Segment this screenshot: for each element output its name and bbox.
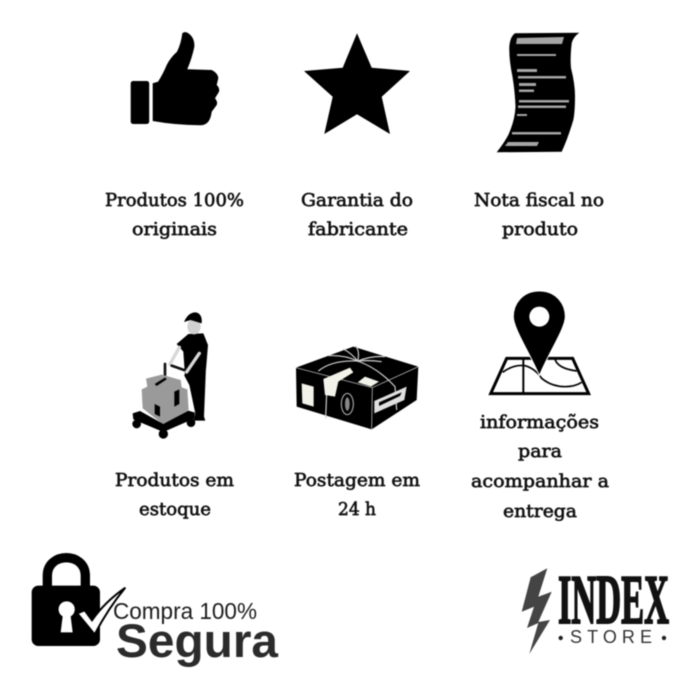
text: Produtos em estoque (115, 470, 234, 520)
logo: Index Store (522, 562, 669, 654)
icon: star (304, 33, 410, 134)
arms (170, 347, 199, 372)
handle plate (374, 387, 407, 413)
badge: secure purchase (32, 558, 279, 667)
ribbon (318, 346, 397, 418)
box edges (296, 367, 418, 429)
dots (558, 636, 666, 640)
text: informações para acompanhar a entrega: entrega (503, 501, 577, 522)
legs (184, 367, 206, 421)
emblem (341, 393, 353, 415)
text: Nota fiscal no produto (474, 190, 604, 240)
label: top sticker (358, 377, 379, 387)
pin (513, 291, 565, 376)
icon: delivery worker with cart (132, 312, 208, 439)
text: Segura: Segura (116, 614, 279, 667)
text: informações para acompanhar a entrega: para (518, 441, 562, 462)
icon: wrapped package (296, 346, 418, 429)
text: Postagem em 24 h (294, 470, 420, 520)
text: Postagem em 24 h: Postagem em (294, 470, 420, 491)
map (491, 358, 589, 394)
head and cap (184, 312, 202, 334)
text: informações para acompanhar a entrega: acompanhar a (471, 471, 609, 492)
text: Garantia do fabricante: Garantia do (301, 190, 413, 211)
text: Garantia do fabricante: fabricante (308, 219, 408, 240)
text: Produtos 100% originais: originais (132, 219, 217, 240)
text: Garantia do fabricante (301, 190, 413, 240)
label: side sticker (302, 383, 314, 407)
icon: map with location pin (491, 291, 589, 394)
cart base (133, 411, 195, 432)
icon: padlock (32, 558, 125, 646)
text: informações para acompanhar a entrega (471, 412, 609, 522)
text: STORE: STORE (570, 627, 652, 647)
box marks (155, 377, 179, 417)
text: informações para acompanhar a entrega: informações (480, 412, 599, 433)
shirt (177, 333, 208, 376)
handle (165, 364, 184, 375)
boxes (142, 375, 189, 425)
icon: lightning bolt (522, 568, 552, 654)
label: tag (323, 368, 353, 397)
text: Nota fiscal no produto: Nota fiscal no (474, 190, 604, 211)
text: Nota fiscal no produto: produto (502, 219, 578, 240)
icon: receipt (497, 33, 579, 152)
pin hole (529, 307, 549, 327)
text: Produtos em estoque: Produtos em (115, 470, 234, 491)
text: Compra 100%: Compra 100% (113, 598, 257, 624)
icon: thumbs up (131, 32, 219, 125)
text: Produtos 100% originais: Produtos 100% (105, 190, 244, 211)
text: Produtos 100% originais (105, 190, 244, 240)
text: Postagem em 24 h: 24 h (338, 499, 376, 520)
icon: check mark (77, 588, 125, 634)
wheels (132, 418, 195, 439)
text: Produtos em estoque: estoque (139, 499, 211, 520)
box body (296, 347, 418, 429)
